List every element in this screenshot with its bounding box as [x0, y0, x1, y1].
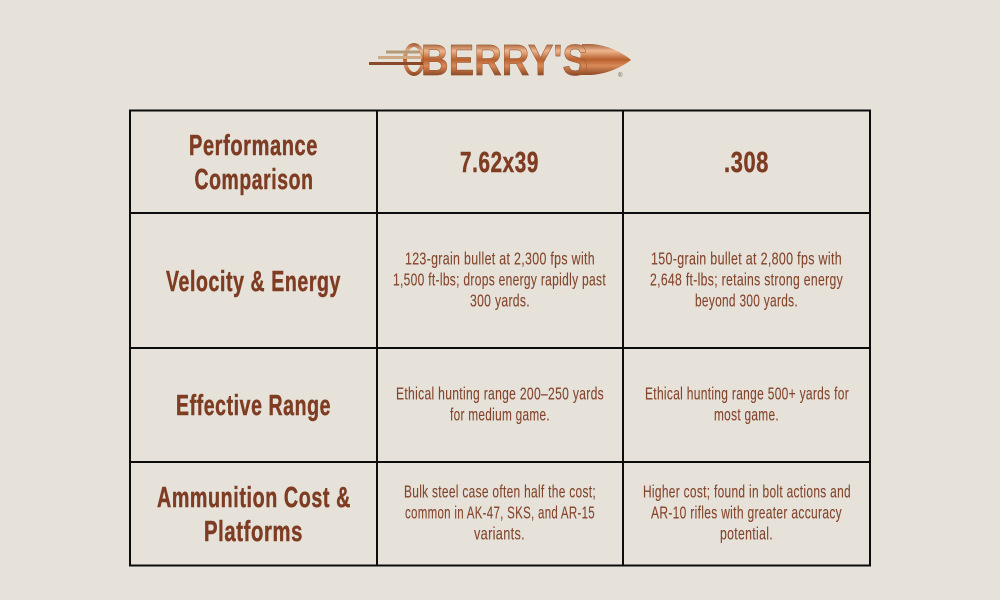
- row label: Ammunition Cost & Platforms: Ammunition Cost &: [157, 482, 351, 514]
- range 7.62x39 text: [396, 384, 604, 425]
- velocity 7.62x39 text: 1,500 ft-lbs; drops energy rapidly past: [393, 270, 606, 290]
- table grid: [130, 110, 870, 566]
- logo oval: [405, 45, 423, 74]
- velocity .308 text: [650, 249, 843, 311]
- logo speed lines: [369, 50, 423, 65]
- velocity .308 text: beyond 300 yards.: [695, 291, 798, 311]
- velocity .308 text: 150-grain bullet at 2,800 fps with: [651, 249, 842, 269]
- header: 7.62x39: 7.62x39: [460, 147, 539, 179]
- header: Performance Comparison: Performance: [189, 130, 318, 162]
- comparison table: [130, 110, 870, 566]
- row label: Ammunition Cost & Platforms: Platforms: [204, 516, 303, 548]
- cost 7.62x39 text: common in AK-47, SKS, and AR-15: [405, 503, 595, 523]
- cost 7.62x39 text: Bulk steel case often half the cost;: [404, 482, 596, 502]
- velocity 7.62x39 text: [393, 249, 606, 311]
- row label: Velocity & Energy: Velocity & Energy: [166, 266, 341, 298]
- range 7.62x39 text: for medium game.: [450, 405, 550, 425]
- range .308 text: most game.: [714, 405, 779, 425]
- velocity 7.62x39 text: 300 yards.: [470, 291, 530, 311]
- range .308 text: Ethical hunting range 500+ yards for: [645, 384, 849, 404]
- header: .308: .308: [724, 147, 769, 179]
- row label: Ammunition Cost & Platforms: [157, 482, 351, 548]
- velocity .308 text: 2,648 ft-lbs; retains strong energy: [650, 270, 843, 290]
- header: Performance Comparison: Comparison: [194, 164, 314, 196]
- logo: Berry's bullet: [369, 36, 631, 85]
- cost 7.62x39 text: variants.: [474, 524, 525, 544]
- logo wordmark: BERRY'S: [421, 36, 588, 85]
- row label: Effective Range: Effective Range: [176, 390, 331, 422]
- velocity 7.62x39 text: 123-grain bullet at 2,300 fps with: [405, 249, 595, 269]
- cost .308 text: AR-10 rifles with greater accuracy: [651, 503, 842, 523]
- cost .308 text: potential.: [720, 524, 773, 544]
- cost .308 text: [643, 482, 851, 544]
- cost .308 text: Higher cost; found in bolt actions and: [643, 482, 851, 502]
- logo bullet tip: [578, 44, 631, 75]
- range .308 text: [645, 384, 849, 425]
- header: Performance Comparison: [189, 130, 318, 196]
- cost 7.62x39 text: [404, 482, 596, 544]
- range 7.62x39 text: Ethical hunting range 200–250 yards: [396, 384, 604, 404]
- logo registered mark: ®: [618, 72, 623, 79]
